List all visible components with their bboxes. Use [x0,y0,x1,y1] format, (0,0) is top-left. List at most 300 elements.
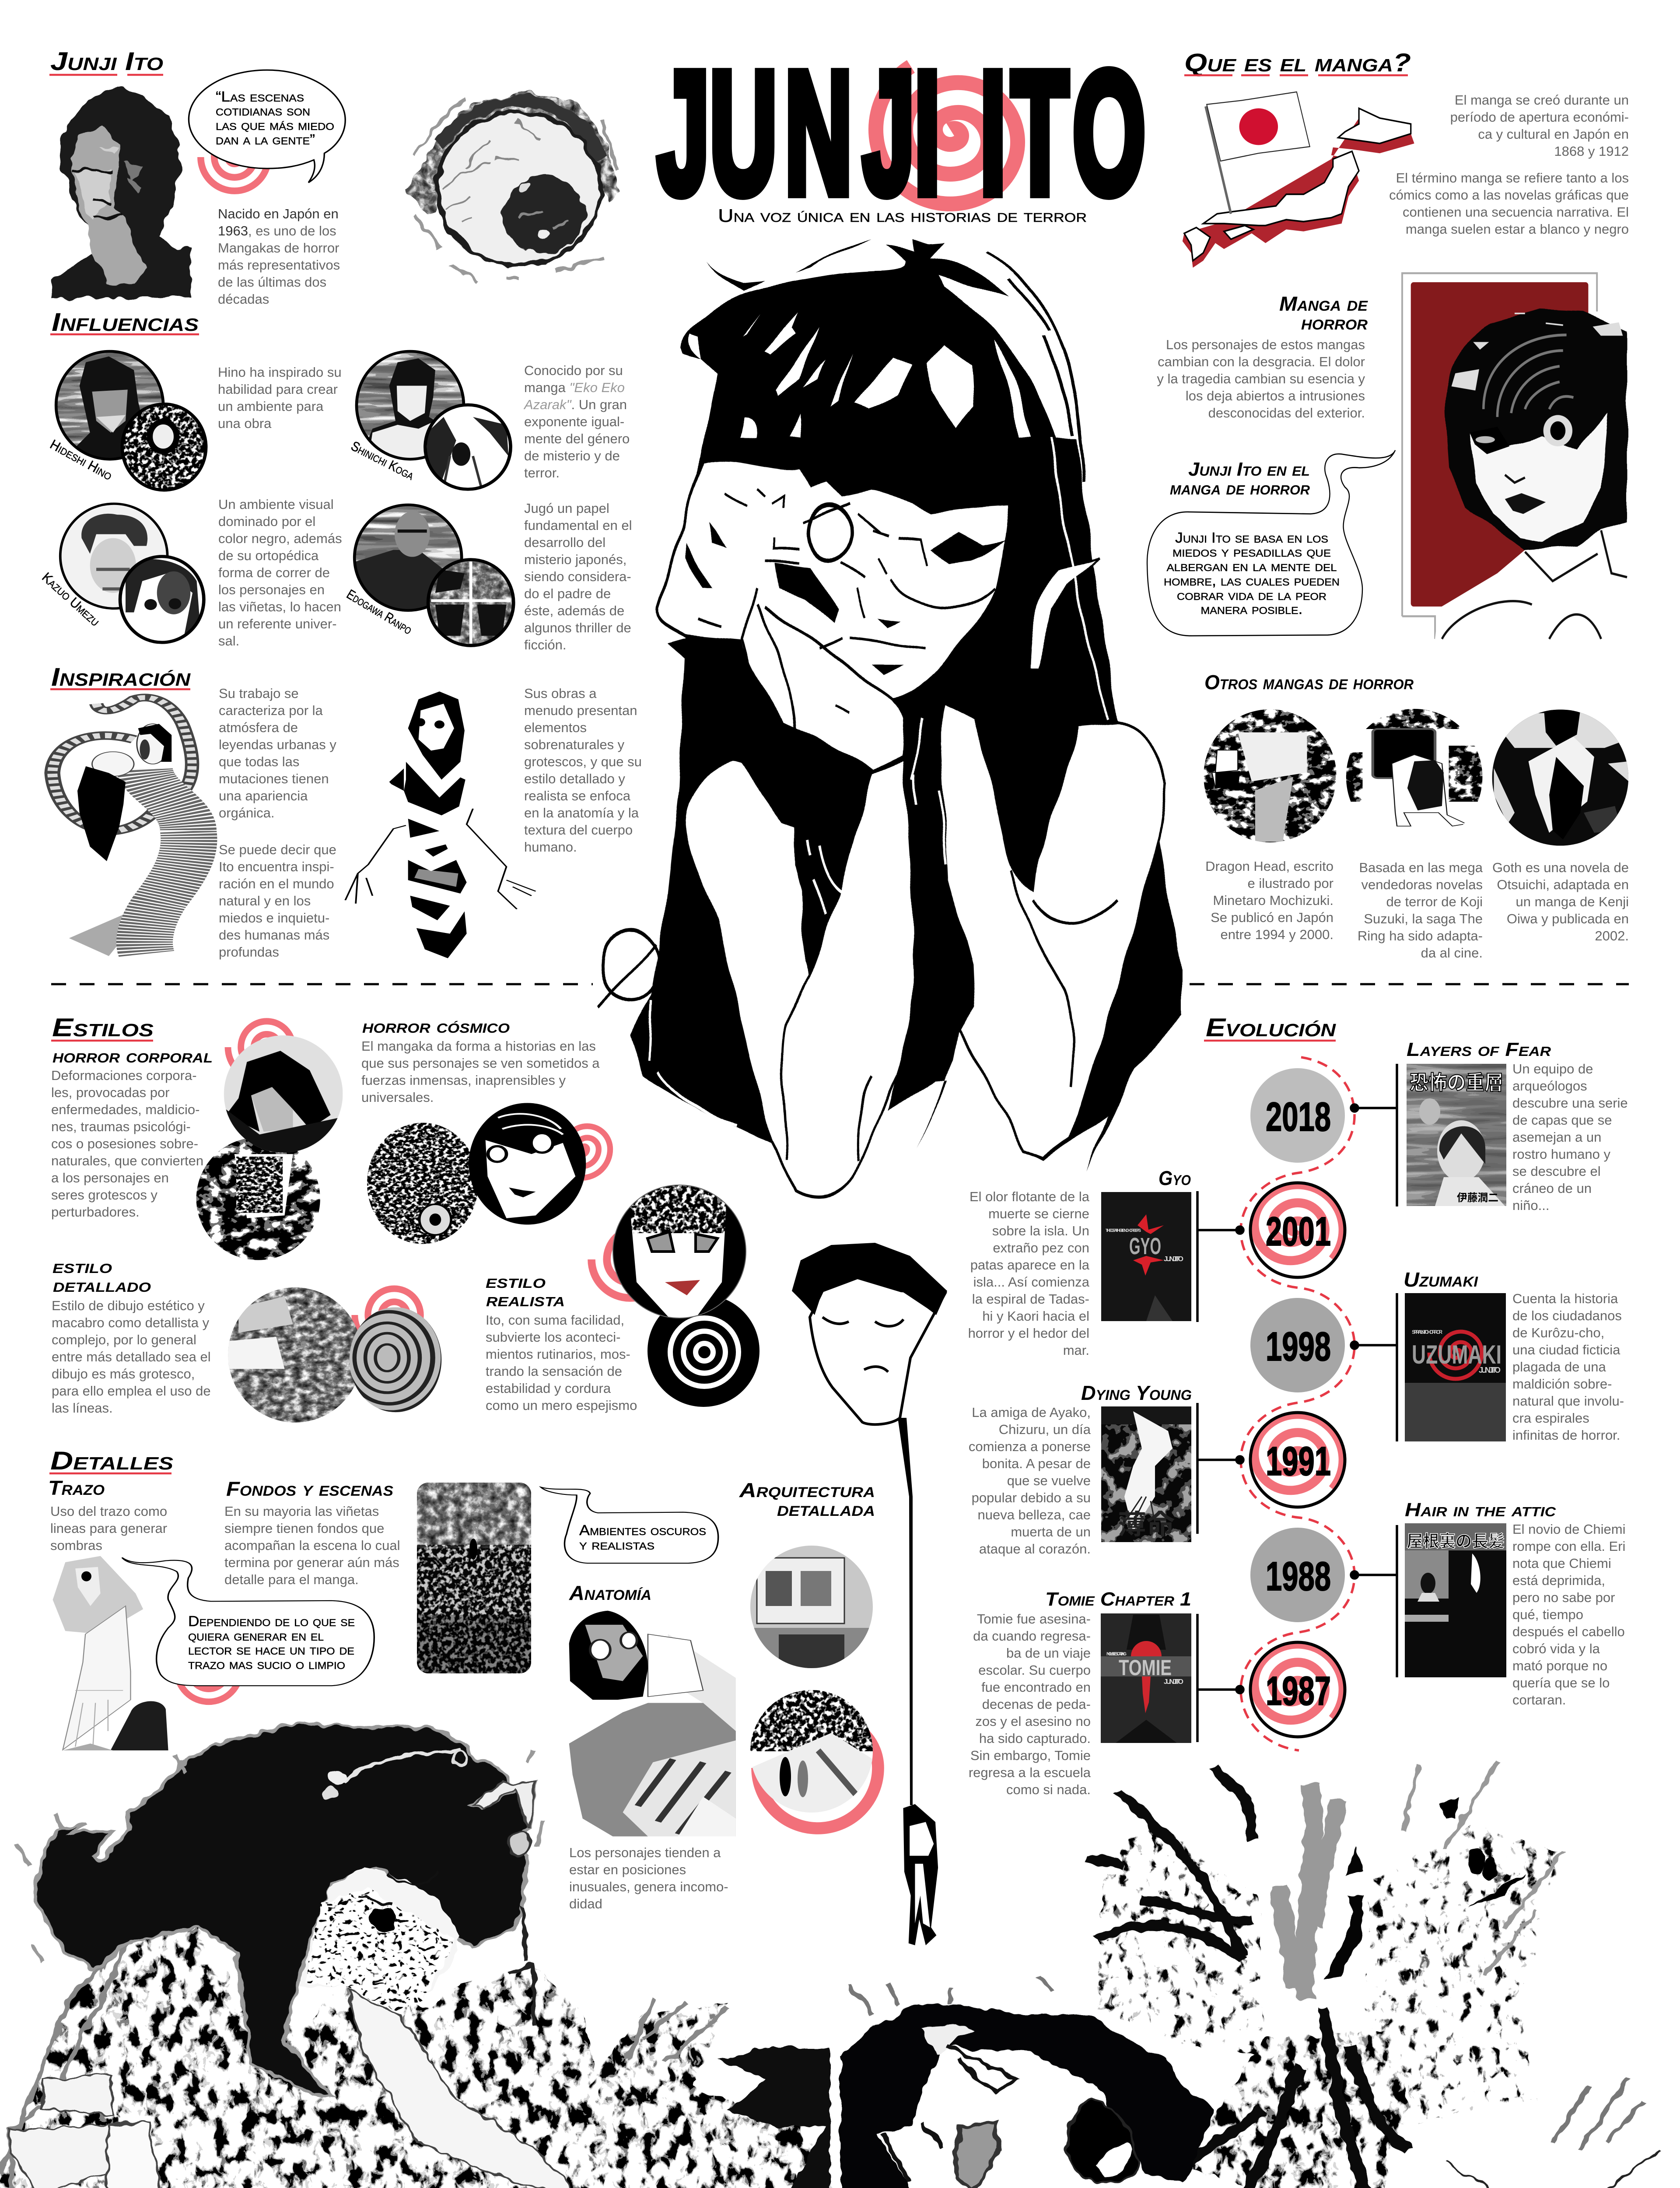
subtitle: Una voz única en las historias de terror [718,205,1087,226]
text: Tomie: fue encontrado en [981,1680,1091,1695]
bubble text: dark ambients [579,1522,706,1553]
text: Hair in the attic: cortaran. [1512,1692,1566,1708]
text: estilo realista: como un mero espejismo [486,1398,637,1413]
heading: estilo realista [486,1271,565,1311]
text: Gyo: hi y Kaori hacia el [982,1308,1089,1324]
section heading: Inspiración: Inspiración [51,663,191,691]
illustration: bottom left, woman vomiting [0,1723,840,2188]
inspiration text 1: orgánica. [219,805,275,820]
text: Manga de horror: los deja abiertos a intrusiones [1186,388,1365,403]
heading: estilo realista: realista [486,1289,565,1311]
heading: Arquitectura detallada [739,1479,875,1520]
spiral: estilo detallado [355,1289,420,1348]
heading: Trazo: Trazo [48,1476,105,1499]
text: Manga de horror: cambian con la desgracia. El dolor [1158,354,1365,369]
year 1991 [1239,1396,1362,1517]
text: Dragon Head: Minetaro Mochizuki. [1213,893,1334,908]
manga text 2: cómics como a las novelas gráficas que [1389,187,1629,203]
influence text: Koga: exponente igual- [524,414,624,429]
heading: Junji Ito en el manga de horror: manga de horror [1170,477,1310,499]
year 1988: 1988 [1266,1553,1331,1599]
heading: Arquitectura detallada: Arquitectura [739,1479,875,1501]
text: horror corporal: a los personajes en [51,1170,169,1185]
inspiration text 3: estilo detallado y [524,771,625,786]
text: Dying Young: popular debido a su [972,1490,1091,1505]
text: Uzumaki: plagada de una [1512,1359,1606,1375]
section heading: Junji Ito: Junji Ito [50,47,163,76]
text: horror corporal: perturbadores. [51,1204,140,1220]
cover: Tomie: TOMIE [1119,1655,1172,1680]
text: horror corporal: enfermedades, maldicio- [51,1102,200,1117]
text: estilo realista: Ito, con suma facilidad, [486,1312,624,1328]
text: Tomie: ba de un viaje [1006,1645,1091,1661]
text: Hair in the attic: mató porque no [1512,1658,1607,1673]
year 2018: 2018 [1266,1094,1331,1140]
influence text: Koga: de misterio y de [524,448,620,463]
bubble text: manera posible. [1200,601,1303,617]
bubble text: stroke note: lector se hace un tipo de [188,1641,354,1658]
influence text: Umezu: los personajes en [218,582,325,597]
title: JUNJI ITO [658,37,1145,230]
text: Dying Young: Chizuru, un día [999,1422,1091,1437]
text: Hair in the attic: está deprimida, [1512,1573,1605,1588]
text: Layers of Fear: cráneo de un [1512,1181,1592,1196]
text: Gyo: extraño pez con [993,1240,1089,1255]
manga text 2: El término manga se refiere tanto a los [1396,170,1629,186]
influence text: Umezu: de su ortopédica [218,548,319,563]
inspiration text 3: menudo presentan [524,703,637,718]
cover: Gyo: GYO [1129,1233,1161,1259]
heading: Arquitectura detallada: detallada [777,1497,875,1520]
name: Kazuo Umezu: Kazuo Umezu [39,569,103,629]
bubble text: stroke note: trazo mas sucio o limpio [188,1656,345,1672]
timeline [1197,1057,1397,1750]
influence text: Hino: habilidad para crear [218,382,338,397]
text: The Ring: de terror de Koji [1386,894,1483,909]
biography text: décadas [218,291,269,307]
text: Hair in the attic: pero no sabe por [1512,1590,1615,1605]
inspiration text 3: textura del cuerpo [524,822,633,838]
kimono hem [0,1939,129,2188]
text: Hair in the attic: qué, tiempo [1512,1607,1583,1622]
main illustration: girl with the mask [598,239,1181,1197]
cover: Uzumaki: JUNJI ITO [1479,1366,1501,1375]
inspiration text 1: atmósfera de [219,720,298,735]
text: Tomie: Tomie fue asesina- [977,1611,1091,1627]
text: estilo detallado: entre más detallado sea el [52,1349,211,1364]
circles: estilo realista [612,1185,766,1409]
vomit stream [348,1991,584,2188]
right black mass [670,2047,830,2188]
right hand [1029,558,1100,669]
text: The Ring: Ring ha sido adapta- [1358,928,1483,943]
circle: The Ring [1345,709,1484,845]
cover: Dying Young: 薄命 [1118,1510,1175,1540]
text: estilo realista: estabilidad y cordura [486,1381,611,1396]
spiral: title [848,35,1040,232]
heading: Tomie Chapter 1: Tomie Chapter 1 [1045,1588,1191,1610]
text: horror corporal: Deformaciones corpora- [51,1068,197,1083]
bang tips [797,458,1010,513]
text: Layers of Fear: descubre una serie [1512,1095,1628,1111]
manga text 1: 1868 y 1912 [1554,144,1629,159]
text: Dragon Head: Se publicó en Japón [1211,910,1334,925]
text: horror corporal: naturales, que convierten [51,1153,203,1168]
influence text: Koga: mente del género [524,431,630,446]
inspiration text 2: Se puede decir que [219,842,336,857]
text: horror corporal: seres grotescos y [51,1187,158,1203]
text: Tomie: como si nada. [1006,1782,1091,1797]
bubble text: dark ambients: Ambientes oscuros [579,1522,706,1538]
text: Hair in the attic: rompe con ella. Eri [1512,1539,1625,1554]
text: The Ring: vendedoras novelas [1362,877,1483,892]
heading: horror corporal: horror corporal [52,1045,213,1067]
influence text: Ranpo: misterio japonés, [524,552,626,567]
bubble text: stroke note: Dependiendo de lo que se [188,1613,355,1629]
text: Fondos y escenas: siempre tienen fondos que [224,1521,384,1536]
cover: Tomie [1101,1613,1191,1743]
quote text: las que más miedo [216,117,334,133]
illustration: stroke example woman [53,1556,168,1750]
cover: Gyo [1101,1192,1191,1321]
quote text: “Las escenas [216,88,304,105]
influence text: Ranpo: do el padre de [524,586,611,601]
illustration: rope [52,698,192,956]
heading: estilo detallado: estilo [52,1256,112,1277]
year 1987: 1987 [1266,1668,1331,1714]
inspiration text 1: una apariencia [219,788,308,803]
heading: Manga de horror: Manga de [1279,292,1368,315]
text: Trazo: sombras [50,1538,102,1553]
name: Hideshi Hino: Hideshi Hino [48,437,115,483]
text: Tomie: regresa a la escuela [969,1765,1091,1780]
influence circles: Hideshi Hino [54,351,207,491]
text: Dragon Head: e ilustrado por [1248,876,1334,891]
text: Fondos y escenas: En su mayoria las viñetas [224,1504,379,1519]
circles: horror corporal [196,1035,343,1260]
cover: Gyo: JUNJI ITO [1164,1255,1183,1263]
cover: Uzumaki: SPIRAL INTO HORROR [1412,1329,1442,1335]
illustration: crowd scene [417,1483,531,1673]
heading: Hair in the attic: Hair in the attic [1405,1499,1556,1521]
illustration: hanged figure [903,1804,938,1945]
manga text 1: período de apertura económi- [1450,109,1629,125]
text: Gyo: horror y el hedor del [968,1325,1089,1341]
influence text: Koga: terror. [524,465,560,480]
text: Fondos y escenas: acompañan la escena lo cual [224,1538,400,1553]
text: Tomie: decenas de peda- [982,1697,1091,1712]
heading: Manga de horror: horror [1301,311,1368,334]
influence text: Umezu: un referente univer- [218,616,337,631]
text: Gyo: El olor flotante de la [970,1189,1089,1204]
influence text: Hino: Hino ha inspirado su [218,365,342,380]
eye [955,2122,998,2188]
text: Anatomía: didad [569,1896,602,1911]
text: Dying Young: La amiga de Ayako, [972,1405,1091,1420]
cover: Layers of Fear: 伊藤潤二 [1457,1192,1498,1204]
year 2018 [1250,1068,1345,1163]
cover: Layers of Fear: 恐怖の重層 [1410,1071,1503,1094]
year 1988 [1250,1528,1345,1622]
text: estilo detallado: complejo, por lo general [52,1332,196,1347]
splash branches [1086,1768,1253,1959]
inspiration text 2: Ito encuentra inspi- [219,859,334,874]
text: Uzumaki: una ciudad ficticia [1512,1342,1620,1357]
inspiration text 3: Sus obras a [524,686,596,701]
speech bubble: quote [189,70,345,182]
inspiration text 3: realista se enfoca [524,788,631,803]
spiral: horror corporal [228,1021,293,1080]
spiral: Arquitectura [757,1720,878,1828]
text: estilo detallado: dibujo es más grotesco, [52,1366,195,1382]
section heading: Influencias: Influencias [52,308,199,337]
bubble text: albergan en la mente del [1166,558,1337,574]
text: Gyo: muerte se cierne [988,1206,1089,1221]
text: Dragon Head: Dragon Head, escrito [1205,859,1334,874]
influence text: Hino: una obra [218,416,272,431]
influence text: Umezu: Un ambiente visual [218,497,334,512]
text: Goth: Goth es una novela de [1492,860,1629,875]
text: Layers of Fear: se descubre el [1512,1164,1601,1179]
illustration: segmented woman [345,691,536,958]
influence text: Hino: un ambiente para [218,399,324,414]
influence text: Ranpo: desarrollo del [524,535,606,550]
hair top [680,239,1085,481]
inspiration text 1: leyendas urbanas y [219,737,336,752]
spiral: horror cósmico [553,1126,610,1178]
text: horror cósmico: que sus personajes se ven sometidos a [361,1055,600,1071]
text: Uzumaki: infinitas de horror. [1512,1427,1620,1443]
illustration: eye [402,89,623,280]
text: estilo detallado: Estilo de dibujo estético y [52,1298,205,1313]
text: Goth: 2002. [1595,928,1629,943]
open mouth [1067,2098,1138,2184]
cover: Dying Young [1101,1406,1191,1542]
text: Hair in the attic: quería que se lo [1512,1675,1610,1690]
text: Tomie: zos y el asesino no [975,1714,1091,1729]
illustration: bottom right, screaming man [840,1760,1659,2188]
text: Gyo: patas aparece en la [970,1257,1090,1273]
face [300,1868,461,2011]
text: Tomie: Sin embargo, Tomie [970,1748,1091,1763]
bubble text [1164,529,1340,617]
cover: Tomie: NO USE ESCAPING [1106,1652,1127,1657]
facial features [686,523,1004,674]
headband [343,1752,461,1782]
illustration: Tomie on red panel [1402,273,1627,639]
text: horror corporal: cos o posesiones sobre- [51,1136,198,1151]
circle: Goth [1492,709,1629,846]
influence circles: Kazuo Umezu [60,504,205,644]
inspiration text 2: des humanas más [219,927,329,943]
text: Layers of Fear: niño... [1512,1198,1549,1213]
dashed timeline path [1241,1057,1354,1750]
biography text: más representativos [218,257,340,273]
circle: Dragon Head [1203,709,1337,843]
text: Goth: Oiwa y publicada en [1507,911,1629,926]
inspiration text 2: natural y en los [219,893,311,908]
text: horror corporal: nes, traumas psicológi- [51,1119,191,1134]
heading: estilo realista: estilo [486,1271,546,1292]
bubble text: stroke note: quiera generar en el [188,1627,324,1644]
influence text: Umezu: dominado por el [218,514,315,529]
illustration: hanging man head [792,1243,947,1805]
influence text: Ranpo: éste, además de [524,603,624,618]
portrait of Junji Ito [50,87,190,298]
text: Manga de horror: desconocidas del exterior. [1208,405,1365,421]
hair loop strand [603,930,659,1000]
text: Fondos y escenas: termina por generar aún más [224,1555,399,1570]
text: Uzumaki: de los ciudadanos [1512,1308,1622,1323]
text: Hair in the attic: después el cabello [1512,1624,1625,1639]
text: Uzumaki: natural que involu- [1512,1393,1624,1409]
inspiration text 3: grotescos, y que su [524,754,642,769]
cover: Hair in the attic [1405,1523,1506,1677]
section heading: Que es el manga: Que es el manga? [1184,49,1411,77]
influence circles: Shinichi Koga [356,351,511,491]
spiral: Trazo [177,1645,241,1702]
section heading: Evolución: Evolución [1206,1013,1337,1042]
hair [36,1723,536,2094]
cover: Uzumaki [1405,1293,1506,1441]
text: Dragon Head: entre 1994 y 2000. [1220,927,1334,942]
bubble text: cobrar vida de la peor [1177,587,1326,603]
cover: Layers of Fear [1407,1064,1506,1206]
inspiration text 1: que todas las [219,754,299,769]
text: Dying Young: que se vuelve [1007,1473,1091,1488]
text: Gyo: sobre la isla. Un [992,1223,1089,1238]
inspiration text 2: ración en el mundo [219,876,334,891]
text: Layers of Fear: Un equipo de [1512,1061,1593,1076]
text: estilo detallado: macabro como detallista y [52,1315,210,1330]
section heading: Detalles: Detalles [50,1447,173,1475]
pale kimono panels [10,2075,145,2188]
text: Goth: un manga de Kenji [1516,894,1629,909]
text: Layers of Fear: asemejan a un [1512,1129,1601,1145]
text: Layers of Fear: de capas que se [1512,1112,1612,1128]
spiral: behind quote [201,130,268,191]
influence text: Ranpo: fundamental en el [524,518,632,533]
text: horror cósmico: fuerzas inmensas, inaprensibles y [361,1073,566,1088]
text: Layers of Fear: arqueólogos [1512,1078,1587,1094]
text: Uzumaki: maldición sobre- [1512,1376,1612,1392]
heading: estilo detallado [52,1256,151,1296]
text: Tomie: escolar. Su cuerpo [978,1662,1091,1678]
text: Goth: Otsuichi, adaptada en [1497,877,1629,892]
text: Manga de horror: y la tragedia cambian su esencia y [1157,371,1365,386]
heading: Manga de horror [1279,292,1368,334]
inspiration text 3: humano. [524,839,577,855]
influence text: Umezu: forma de correr de [218,565,330,580]
text: The Ring: Suzuki, la saga The [1364,911,1483,926]
text: Gyo: mar. [1063,1343,1089,1358]
text: Fondos y escenas: detalle para el manga. [224,1572,359,1587]
heading: horror cósmico: horror cósmico [362,1016,510,1037]
quote text [216,88,334,147]
quote text: dan a la gente” [216,131,315,147]
circles: estilo detallado [228,1287,444,1423]
text: estilo realista: mientos rutinarios, mos- [486,1346,630,1362]
text: Dying Young: nueva belleza, cae [977,1507,1091,1522]
left arm [684,759,915,1197]
text: Dying Young: ataque al corazón. [979,1541,1091,1557]
bubble text: hombre, las cuales pueden [1164,572,1340,589]
influence text: Ranpo: ficción. [524,637,566,652]
inspiration text 1: mutaciones tienen [219,771,329,786]
right arm [940,704,1166,1158]
heading: estilo detallado: detallado [53,1275,151,1296]
spiral: estilo realista [592,1229,668,1298]
inspiration text 3: sobrenaturales y [524,737,625,752]
cover: Hair in the attic: 屋根裏の長髪 [1407,1532,1505,1551]
year 1998: 1998 [1266,1324,1331,1369]
circles: Arquitectura [750,1546,873,1813]
influence text: Umezu: color negro, además [218,531,342,546]
inspiration text 1: caracteriza por la [219,703,323,718]
bubble text: stroke note [188,1613,355,1672]
influence text: Ranpo: algunos thriller de [524,620,631,635]
text: horror corporal: les, provocadas por [51,1085,170,1100]
influence text: Ranpo: Jugó un papel [524,501,609,516]
connectors [1197,1064,1397,1742]
year 1998 [1250,1298,1345,1392]
influence text: Ranpo: siendo considera- [524,569,631,584]
biography text: Nacido en Japón en [218,206,339,221]
section heading: Estilos: Estilos [52,1013,154,1042]
heading: Junji Ito en el manga de horror [1170,459,1310,499]
text: Dying Young: bonita. A pesar de [982,1456,1091,1471]
text: horror cósmico: El mangaka da forma a historias en las [361,1038,596,1054]
heading: Gyo: Gyo [1158,1167,1191,1189]
heading: Dying Young: Dying Young [1081,1382,1192,1404]
cover: Tomie: JUNJI ITO [1164,1678,1183,1686]
inspiration text 3: en la anatomía y la [524,805,639,820]
text: Tomie: ha sido capturado. [979,1731,1091,1746]
influence circles: Edogawa Ranpo [354,505,515,646]
heading: Fondos y escenas: Fondos y escenas [226,1477,394,1500]
text: Trazo: lineas para generar [50,1521,167,1536]
bubble text: miedos y pesadillas que [1172,543,1331,560]
text: The Ring: da al cine. [1421,945,1483,961]
speech bubble: dark ambients [541,1487,718,1563]
text: Hair in the attic: El novio de Chiemi [1512,1522,1625,1537]
text: horror cósmico: universales. [361,1090,434,1105]
biography text: de las últimas dos [218,274,326,290]
text: Tomie: da cuando regresa- [973,1628,1091,1644]
text: Anatomía: Los personajes tienden a [569,1845,721,1860]
heading: Anatomía: Anatomía [569,1581,651,1604]
text: Gyo: la espiral de Tadas- [972,1291,1089,1307]
text: estilo detallado: para ello emplea el uso de [52,1383,211,1399]
inspiration text 2: profundas [219,944,279,960]
illustration: anatomy woman [569,1611,736,1836]
influence text: Umezu: sal. [218,633,239,649]
manga text 1: ca y cultural en Japón en [1478,126,1629,142]
heading: Uzumaki: Uzumaki [1404,1268,1478,1291]
cover: Uzumaki: UZUMAKI [1412,1340,1502,1369]
inspiration text 1: Su trabajo se [219,686,299,701]
year 2001: 2001 [1266,1209,1331,1254]
text: The Ring: Basada en las mega [1359,860,1483,875]
text: Uzumaki: Cuenta la historia [1512,1291,1618,1306]
influence text: Koga: Conocido por su [524,363,623,378]
text: Uzumaki: de Kurôzu-cho, [1512,1325,1604,1340]
inspiration text 2: miedos e inquietu- [219,910,329,926]
year 2001 [1239,1166,1362,1287]
manga text 1: El manga se creó durante un [1455,92,1629,108]
chest lines [1253,2150,1659,2188]
bubble text: dark ambients: y realistas [579,1536,654,1553]
